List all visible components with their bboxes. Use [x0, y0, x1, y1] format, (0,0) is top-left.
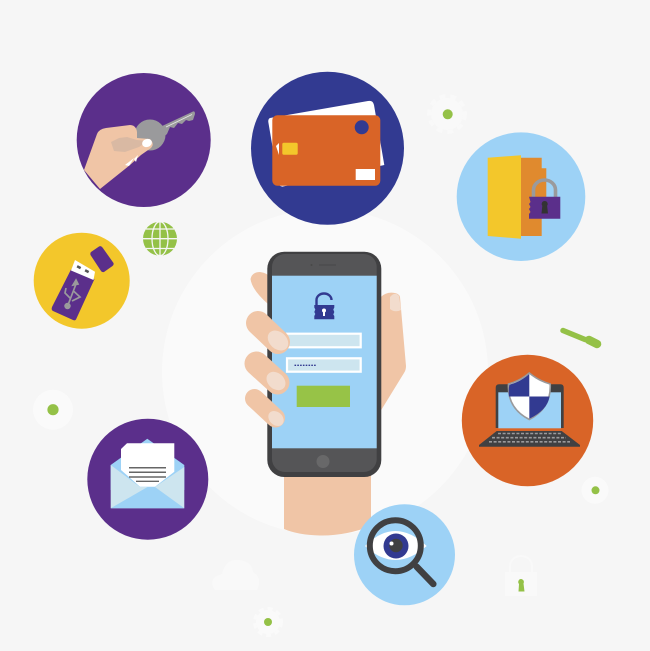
icon: folder front [488, 155, 521, 239]
thumb side of hand [380, 293, 406, 412]
icon: white back card [268, 101, 384, 187]
password field [287, 358, 361, 372]
icon: laptop keyboard [479, 431, 580, 447]
icon: green dot right [582, 477, 608, 504]
icon: orange card [272, 115, 380, 186]
background white circle [162, 209, 488, 535]
icon: USB body [52, 270, 94, 320]
icon: faint cloud [212, 560, 259, 590]
infographic: mobile security illustration [34, 72, 602, 626]
icon: key [134, 111, 195, 150]
icon: padlock [529, 180, 560, 219]
icon: card chip [276, 143, 298, 155]
finger 3 [254, 398, 287, 429]
login button [297, 386, 350, 407]
username field [287, 334, 361, 347]
icon: envelope front [111, 465, 184, 508]
icon: gear with green dot bottom [254, 608, 282, 636]
icon: USB cap [90, 246, 114, 272]
panel: USB drive circle [34, 233, 130, 329]
phone screen [272, 276, 377, 448]
icon: faint padlock [505, 556, 537, 596]
phone bezel [272, 254, 377, 472]
panel: key in hand circle [77, 73, 211, 207]
icon: open lock [314, 294, 334, 319]
icon: magnifier [370, 520, 433, 584]
icon: green link [563, 330, 597, 344]
panel: laptop shield circle [462, 355, 593, 486]
icon: laptop screen [496, 384, 564, 428]
finger 1 [258, 323, 292, 355]
icon: folder back [521, 158, 546, 236]
icon: card dot [355, 120, 369, 134]
phone body [267, 252, 381, 477]
icon: hand holding key [84, 125, 153, 189]
panel: locked folder circle [457, 132, 585, 261]
panel: credit card circle [251, 72, 404, 225]
panel: magnifier eye circle [354, 504, 455, 605]
icon: green dot left [33, 390, 73, 430]
icon: envelope back [111, 439, 184, 490]
finger 2 [256, 364, 289, 394]
back finger [250, 272, 270, 304]
thumb nail [390, 294, 401, 311]
panel: envelope circle [87, 419, 208, 540]
icon: letter [121, 443, 174, 487]
wrist [284, 470, 371, 536]
icon: USB symbol [65, 280, 80, 308]
icon: globe [143, 222, 177, 256]
icon: USB connector [71, 260, 95, 280]
icon: eye [365, 531, 426, 560]
home button [316, 455, 330, 468]
panel: phone in hand [250, 252, 406, 536]
icon: shield [508, 373, 550, 420]
speaker [310, 264, 336, 266]
icon: gear with green dot top [429, 96, 465, 132]
icon: card white label [356, 169, 375, 180]
